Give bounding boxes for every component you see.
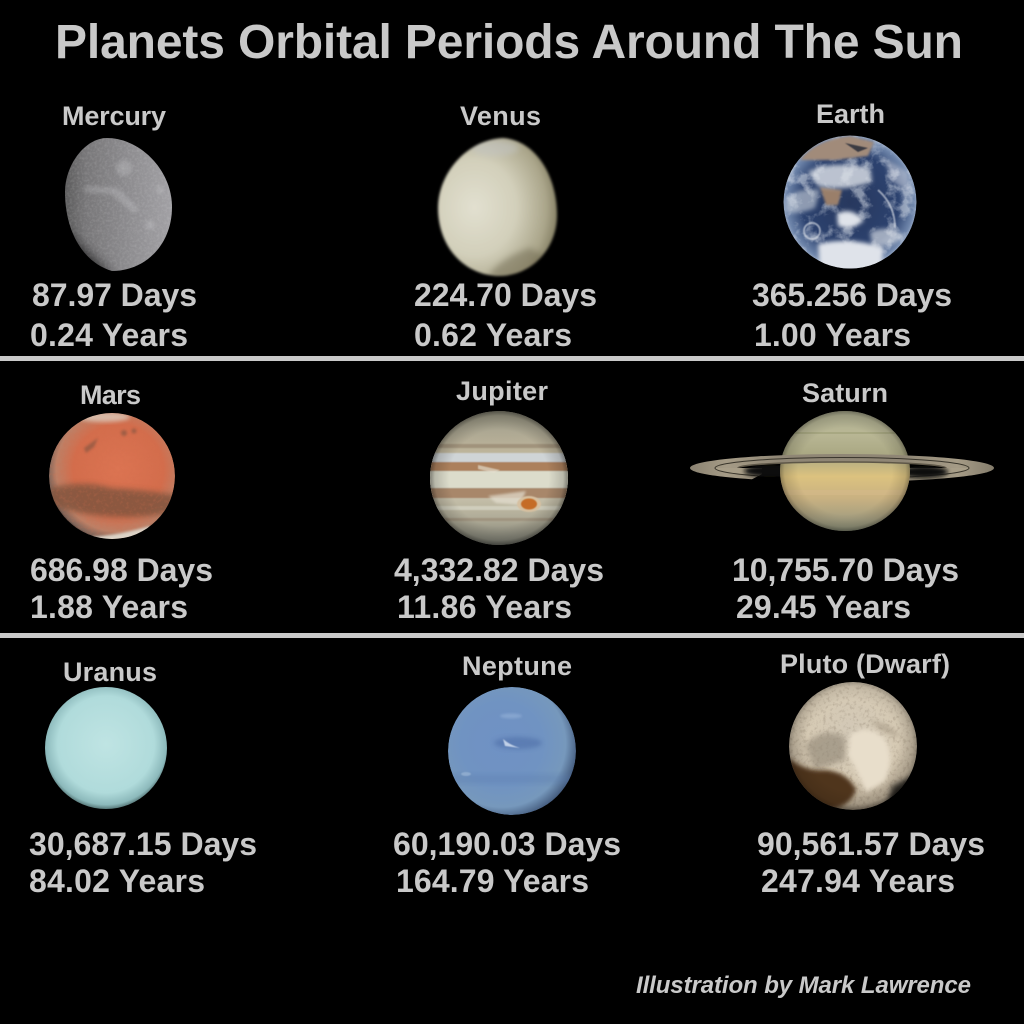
Pluto years: 247.94 Years xyxy=(761,863,955,899)
body xyxy=(780,411,910,531)
panel: Venus xyxy=(414,101,597,353)
panel: Pluto xyxy=(757,649,985,899)
icon: Saturn planet xyxy=(690,405,994,535)
panel: Mercury xyxy=(30,101,197,353)
Mars name: Mars xyxy=(80,380,141,410)
panel: Earth xyxy=(752,99,952,353)
title: Planets Orbital Periods Around The Sun xyxy=(55,16,963,69)
Saturn days: 10,755.70 Days xyxy=(732,552,959,588)
Earth name: Earth xyxy=(816,99,885,129)
panel: Jupiter xyxy=(394,376,604,625)
icon: Mercury planet xyxy=(65,138,172,271)
Venus years: 0.62 Years xyxy=(414,317,572,353)
shadow on rings xyxy=(744,465,948,478)
Uranus name: Uranus xyxy=(63,657,157,687)
Uranus days: 30,687.15 Days xyxy=(29,826,257,862)
rings in front of the body xyxy=(690,454,994,468)
icon: Uranus planet xyxy=(45,687,167,809)
panel: Neptune xyxy=(393,651,621,899)
panel: Saturn xyxy=(690,378,994,625)
credit: Illustration by Mark Lawrence xyxy=(636,972,971,999)
panel: Mars xyxy=(30,380,213,625)
Pluto days: 90,561.57 Days xyxy=(757,826,985,862)
divider: row one and two xyxy=(0,356,1024,361)
Mars years: 1.88 Years xyxy=(30,589,188,625)
Venus days: 224.70 Days xyxy=(414,277,597,313)
Venus name: Venus xyxy=(460,101,541,131)
Jupiter days: 4,332.82 Days xyxy=(394,552,604,588)
Mars days: 686.98 Days xyxy=(30,552,213,588)
Earth years: 1.00 Years xyxy=(754,317,911,353)
Mercury years: 0.24 Years xyxy=(30,317,188,353)
Jupiter years: 11.86 Years xyxy=(397,589,572,625)
Neptune days: 60,190.03 Days xyxy=(393,826,621,862)
Mercury name: Mercury xyxy=(62,101,166,131)
Mercury days: 87.97 Days xyxy=(32,277,197,313)
Saturn name: Saturn xyxy=(802,378,888,408)
Jupiter name: Jupiter xyxy=(456,376,548,406)
icon: Jupiter planet xyxy=(428,408,570,548)
rings behind the body xyxy=(690,468,994,480)
Saturn years: 29.45 Years xyxy=(736,589,911,625)
icon: Mars planet xyxy=(49,412,176,545)
icon: Neptune planet xyxy=(448,687,576,815)
Neptune years: 164.79 Years xyxy=(396,863,589,899)
Earth days: 365.256 Days xyxy=(752,277,952,313)
icon: Pluto planet xyxy=(789,682,920,815)
panel: Uranus xyxy=(29,657,257,899)
icon: Earth planet xyxy=(783,135,917,272)
icon: Venus planet xyxy=(436,136,559,278)
Uranus years: 84.02 Years xyxy=(29,863,205,899)
Neptune name: Neptune xyxy=(462,651,572,681)
Pluto name: Pluto (Dwarf) xyxy=(780,649,950,679)
divider: row two and three xyxy=(0,633,1024,638)
